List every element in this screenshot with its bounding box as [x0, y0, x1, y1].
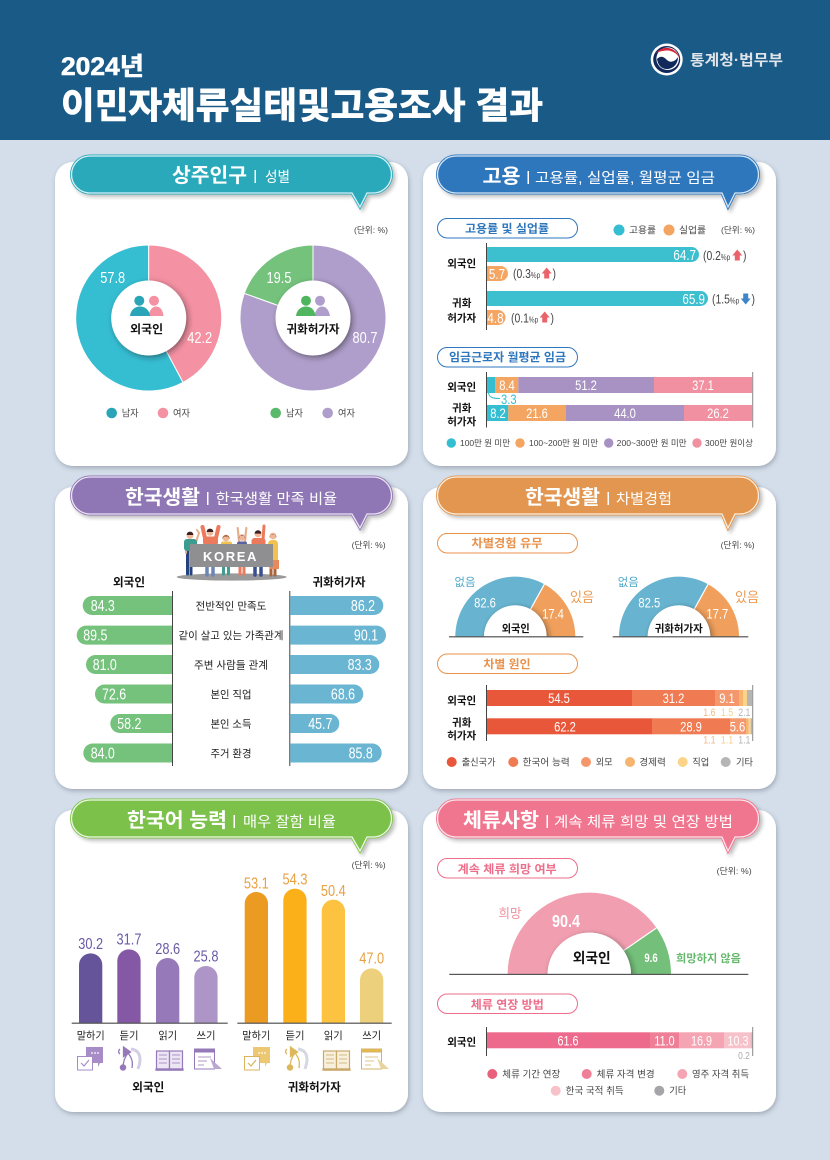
stacked bar chart: extension method: 0.2	[738, 1050, 750, 1062]
arrow up	[542, 268, 552, 278]
stacked bar chart: wage: 37.1	[692, 378, 714, 393]
bar chart: naturalized: 54.3	[283, 871, 307, 889]
stacked bar chart: extension method: 16.9	[691, 1033, 712, 1049]
illustration: people holding KOREA sign	[177, 526, 287, 581]
butterfly bar chart: 81.0	[93, 656, 117, 673]
bar chart: foreigners: 31.7	[117, 931, 141, 949]
bar chart: employment and unemployment: )	[751, 292, 755, 307]
stacked bar chart: reasons: 외국인	[447, 695, 476, 707]
stacked bar chart: extension method	[447, 1027, 753, 1062]
butterfly bar chart: 83.3	[348, 656, 372, 673]
icon: listening	[286, 1047, 307, 1070]
stacked bar chart: wage: 44.0	[614, 406, 636, 421]
bar chart: employment and unemployment: 허가자	[447, 312, 477, 325]
unit note: (단위: %)	[721, 225, 755, 235]
panel heading: 상주인구	[172, 164, 247, 187]
legend: wage: 300만 원이상	[705, 438, 753, 448]
title year: 2024년	[61, 53, 144, 81]
bar chart: foreigners: 듣기	[120, 1030, 138, 1042]
panel: population by gender	[55, 156, 408, 466]
legend: extension method: 체류 자격 변경	[597, 1068, 655, 1080]
stacked bar chart: wage	[447, 372, 753, 428]
stacked bar chart: reasons: 1.5	[721, 707, 734, 719]
icon: listening	[119, 1047, 140, 1070]
panel heading: 한국생활	[525, 486, 600, 509]
stacked bar chart: reasons: 54.5	[548, 691, 570, 706]
stacked bar chart: reasons: 1.6	[703, 707, 716, 719]
callout: 3.3: 3.3	[501, 392, 517, 407]
icon: writing	[194, 1049, 222, 1069]
donut chart: naturalized: 80.7	[353, 330, 377, 347]
subheading: extension method: 체류 연장 방법	[471, 998, 544, 1011]
legend: extension method	[487, 1068, 749, 1097]
legend: wage	[447, 438, 753, 448]
legend: reasons: 출신국가	[462, 758, 496, 768]
bar chart: foreigners: 쓰기	[196, 1030, 216, 1042]
semi-donut: naturalized	[612, 576, 758, 638]
panel heading	[438, 156, 758, 207]
legend: reasons: 기타	[736, 758, 753, 768]
legend: wage: 100~200만 원 미만	[529, 438, 598, 448]
bar chart: naturalized: 듣기	[286, 1030, 304, 1042]
bar chart: employment and unemployment: (0.1%p	[511, 311, 538, 326]
stacked bar chart: wage: 귀화	[452, 402, 472, 415]
legend: naturalized: 남자	[286, 408, 303, 420]
bar chart: employment and unemployment: 5.7	[489, 266, 505, 282]
butterfly bar chart: 본인 직업	[210, 688, 252, 701]
semi-donut: intention to stay: 희망	[498, 906, 522, 921]
legend: employment: 고용률	[629, 226, 656, 236]
butterfly bar chart: 85.8	[349, 744, 373, 762]
butterfly bar chart: 전반적인 만족도	[196, 600, 267, 612]
bar chart: employment and unemployment: )	[551, 311, 554, 326]
bar chart: naturalized: 말하기	[242, 1029, 270, 1042]
subheading: intention to stay: 계속 체류 희망 여부	[458, 862, 557, 876]
bar chart: foreigners: 28.6	[155, 941, 180, 958]
semi-donut: foreigners: 82.6	[474, 596, 496, 611]
legend: extension method: 한국 국적 취득	[566, 1085, 624, 1097]
icon: reading	[323, 1051, 350, 1070]
butterfly bar chart: 86.2	[351, 597, 375, 614]
unit note: (단위: %)	[354, 225, 388, 235]
donut chart: foreigners	[76, 245, 222, 391]
icon: speaking	[78, 1047, 103, 1070]
butterfly bar chart: 68.6	[331, 685, 355, 703]
bar chart: employment and unemployment: (0.2%p	[703, 249, 730, 263]
panel heading: 매우 잘함 비율	[243, 814, 336, 831]
bar chart: employment and unemployment: )	[743, 249, 747, 263]
stacked bar chart: wage: 21.6	[526, 406, 548, 421]
legend: extension method: 기타	[669, 1086, 687, 1097]
icon: writing	[362, 1049, 389, 1069]
legend: naturalized	[270, 408, 355, 420]
subheading: intention to stay	[438, 858, 578, 878]
legend: foreigners	[106, 408, 190, 420]
semi-donut: intention to stay	[449, 892, 748, 975]
bar chart: foreigners: 읽기	[158, 1029, 177, 1042]
butterfly bar chart: 45.7	[308, 715, 333, 732]
semi-donut: foreigners: 17.4	[542, 606, 564, 622]
arrow up	[540, 312, 550, 322]
stacked bar chart: reasons: 2.1	[738, 707, 751, 719]
icon: speaking	[244, 1047, 270, 1070]
panel heading: 한국생활	[125, 486, 200, 509]
legend: naturalized: 여자	[338, 408, 355, 420]
legend: employment: 실업률	[679, 224, 706, 236]
bar chart: naturalized: 47.0	[359, 950, 384, 968]
unit note: (단위: %)	[721, 540, 755, 550]
subheading: extension method	[438, 994, 578, 1014]
semi-donut: foreigners: 외국인	[502, 623, 530, 635]
butterfly bar chart: 72.6	[102, 685, 126, 703]
panel heading: 한국생활 만족 비율	[216, 491, 337, 508]
semi-donut: foreigners: 없음	[454, 576, 476, 589]
unit note: (단위: %)	[717, 866, 752, 876]
bar chart: employment and unemployment: )	[553, 267, 556, 281]
panel: discrimination	[423, 477, 776, 789]
arrow down	[741, 294, 751, 304]
legend: foreigners: 남자	[122, 408, 139, 420]
bar chart: foreigners: 말하기	[77, 1029, 105, 1042]
stacked bar chart: reasons: 1.1	[703, 735, 716, 747]
group label: naturalized: 귀화허가자	[288, 1080, 341, 1094]
stacked bar chart: extension method: 11.0	[654, 1033, 675, 1049]
legend: reasons	[447, 756, 753, 768]
logo emblem	[651, 44, 683, 76]
semi-donut: naturalized: 없음	[618, 576, 639, 589]
panel: employment	[423, 156, 776, 466]
bar chart: foreigners: 30.2	[78, 936, 103, 953]
bar chart: employment and unemployment: (1.5%p	[712, 292, 739, 307]
icon: reading	[156, 1051, 183, 1070]
subheading: employment and unemployment: 고용률 및 실업률	[465, 223, 549, 236]
butterfly bar chart: 주거 환경	[210, 747, 252, 760]
legend: reasons: 외모	[596, 756, 613, 768]
panel heading: 차별경험	[616, 491, 672, 508]
bar chart: foreigners: 25.8	[194, 948, 218, 966]
column heading: foreigners: 외국인	[113, 576, 145, 589]
header banner	[0, 0, 830, 140]
stacked bar chart: reasons	[447, 685, 753, 747]
legend: extension method: 체류 기간 연장	[502, 1070, 561, 1080]
subheading: discrimination experience: 차별경험 유무	[472, 536, 543, 550]
panel heading	[72, 477, 392, 528]
bar chart: foreigners	[72, 931, 228, 1042]
panel: life satisfaction	[55, 477, 408, 789]
arrow up	[732, 250, 742, 260]
subheading: reasons for discrimination	[438, 654, 578, 674]
stacked bar chart: extension method: 10.3	[728, 1033, 749, 1049]
stacked bar chart: wage: 허가자	[447, 415, 477, 428]
legend: wage: 100만 원 미만	[460, 438, 510, 448]
stacked bar chart: extension method: 61.6	[558, 1033, 579, 1049]
stacked bar chart: wage: 8.2	[490, 406, 506, 421]
stacked bar chart: extension method: 외국인	[447, 1037, 476, 1049]
stacked bar chart: reasons: 1.1	[721, 735, 734, 747]
organization names: 통계청·법무부	[690, 52, 783, 69]
illustration: people holding KOREA sign: KOREA	[203, 549, 258, 564]
panel heading: 성별	[265, 169, 290, 186]
donut chart: foreigners: 42.2	[187, 330, 212, 347]
donut chart: foreigners: 57.8	[100, 270, 125, 287]
semi-donut: intention to stay: 90.4	[552, 912, 580, 931]
subheading: discrimination experience	[438, 534, 578, 553]
panel heading	[438, 477, 758, 528]
stacked bar chart: wage: 외국인	[447, 382, 476, 394]
bar chart: naturalized: 쓰기	[362, 1030, 381, 1042]
icon: two people	[296, 296, 330, 316]
stacked bar chart: wage: 26.2	[707, 406, 729, 421]
legend: wage: 200~300만 원 미만	[617, 438, 687, 448]
legend: extension method: 영주 자격 취득	[692, 1068, 749, 1080]
icon: two people	[130, 296, 164, 316]
legend: foreigners: 여자	[173, 408, 190, 420]
bar chart: employment and unemployment	[447, 243, 755, 330]
column heading: naturalized: 귀화허가자	[312, 575, 366, 589]
bar chart: employment and unemployment: 64.7	[673, 247, 696, 263]
panel heading: 고용률, 실업률, 월평균 임금	[535, 170, 715, 187]
semi-donut: foreigners: 있음	[570, 590, 594, 605]
butterfly bar chart: 84.3	[91, 597, 115, 614]
stacked bar chart: reasons: 5.6	[730, 719, 745, 735]
butterfly bar chart: 84.0	[91, 744, 115, 762]
panel heading: 계속 체류 희망 및 연장 방법	[554, 814, 733, 831]
stacked bar chart: reasons: 1.1	[738, 735, 751, 747]
semi-donut: naturalized: 귀화허가자	[655, 622, 703, 635]
legend: reasons: 경제력	[639, 756, 666, 768]
callout: 3.3	[488, 392, 517, 407]
bar chart: employment and unemployment: 65.9	[682, 291, 705, 307]
semi-donut: naturalized: 82.5	[638, 596, 660, 611]
panel: Korean language ability	[55, 800, 408, 1112]
butterfly bar chart: 58.2	[117, 715, 142, 732]
legend: employment	[614, 224, 706, 236]
legend: reasons: 한국어 능력	[523, 756, 570, 768]
stacked bar chart: wage: 8.4	[499, 378, 515, 393]
stacked bar chart: wage: 51.2	[575, 378, 597, 393]
butterfly bar chart: 89.5	[83, 626, 108, 644]
stacked bar chart: reasons: 9.1	[719, 691, 735, 706]
panel: residence	[423, 800, 776, 1112]
donut chart: naturalized	[240, 245, 386, 391]
bar chart: employment and unemployment: 외국인	[447, 258, 476, 270]
stacked bar chart: reasons: 귀화	[452, 716, 472, 729]
subheading: monthly wage: 임금근로자 월평균 임금	[449, 350, 566, 364]
panel heading	[438, 800, 758, 851]
stacked bar chart: reasons: 허가자	[447, 729, 477, 742]
panel heading	[72, 156, 392, 207]
main title: 이민자체류실태및고용조사 결과	[61, 85, 543, 126]
semi-donut: intention to stay: 희망하지 않음	[676, 951, 741, 965]
panel heading: 한국어 능력	[127, 809, 227, 832]
stacked bar chart: reasons: 31.2	[663, 691, 684, 706]
subheading: reasons for discrimination: 차별 원인	[484, 657, 530, 671]
butterfly bar chart: 90.1	[354, 626, 378, 644]
semi-donut: intention to stay: 9.6	[644, 952, 658, 965]
panel heading	[72, 800, 392, 851]
stacked bar chart: reasons: 62.2	[554, 719, 576, 735]
bar chart: naturalized: 50.4	[321, 883, 346, 900]
group label: foreigners: 외국인	[132, 1081, 164, 1094]
butterfly bar chart: 같이 살고 있는 가족관계	[178, 630, 284, 642]
butterfly bar chart: 본인 소득	[210, 718, 252, 730]
donut chart: foreigners: 외국인	[130, 323, 163, 336]
bar chart: naturalized	[237, 871, 392, 1042]
subheading: employment and unemployment	[438, 218, 578, 238]
bar chart: employment and unemployment: (0.3%p	[513, 267, 540, 281]
bar chart: employment and unemployment: 귀화	[452, 297, 472, 310]
subheading: monthly wage	[438, 348, 578, 367]
bar chart: naturalized: 읽기	[324, 1029, 343, 1042]
donut chart: naturalized: 귀화허가자	[286, 322, 340, 336]
semi-donut: foreigners	[449, 576, 594, 638]
semi-donut: naturalized: 있음	[735, 590, 759, 605]
unit note: (단위: %)	[352, 540, 386, 550]
unit note: (단위: %)	[352, 860, 386, 870]
bar chart: naturalized: 53.1	[244, 875, 269, 893]
butterfly bar chart	[77, 591, 386, 766]
legend: reasons: 직업	[692, 756, 709, 768]
panel heading: 고용	[482, 165, 520, 188]
butterfly bar chart: 주변 사람들 관계	[194, 658, 268, 672]
stacked bar chart: reasons: 28.9	[680, 719, 702, 735]
donut chart: naturalized: 19.5	[267, 270, 291, 287]
panel heading: 체류사항	[463, 809, 539, 832]
semi-donut: naturalized: 17.7	[706, 606, 728, 622]
bar chart: employment and unemployment: 4.8	[487, 310, 504, 326]
semi-donut: intention to stay: 외국인	[573, 950, 611, 966]
